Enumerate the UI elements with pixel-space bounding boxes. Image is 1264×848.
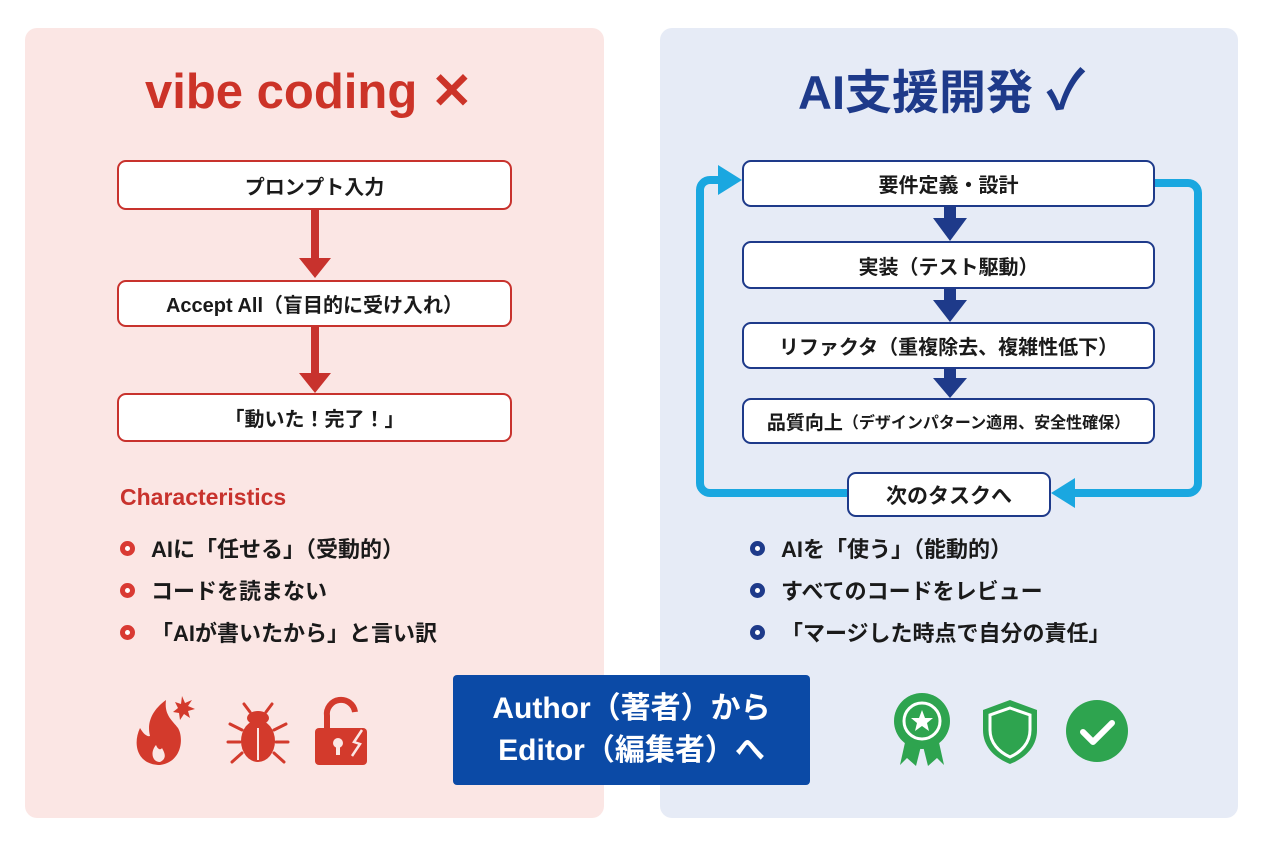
panel: AI assisted development <box>660 28 1238 818</box>
flow box: accept all: Accept All（盲目的に受け入れ） <box>166 295 463 317</box>
flow box: prompt <box>117 160 512 210</box>
flow box: requirements <box>742 160 1155 207</box>
panel: vibe coding <box>25 28 604 818</box>
flow box: prompt: プロンプト入力 <box>245 176 384 198</box>
flow box: refactor <box>742 322 1155 369</box>
callout: Author to Editor: Author（著者）から <box>492 692 771 725</box>
flow box: accept all <box>117 280 512 327</box>
icons: fire bug lock <box>136 696 367 765</box>
arrows: red <box>299 210 331 393</box>
list: vibe characteristics: 「AIが書いたから」と言い訳 <box>151 621 437 646</box>
callout: Author to Editor: Editor（編集者）へ <box>498 734 765 767</box>
flow box: done <box>117 393 512 442</box>
flow box: next task: 次のタスクへ <box>886 484 1012 508</box>
title: vibe coding: vibe coding ✕ <box>145 63 473 119</box>
arrows: blue flow and cyan loop <box>696 165 1202 508</box>
list: vibe characteristics: コードを読まない <box>151 579 327 604</box>
list: AI assisted points: AIを「使う」（能動的） <box>781 537 1012 562</box>
flow box: implementation: 実装（テスト駆動） <box>858 256 1038 278</box>
heading: Characteristics: Characteristics <box>120 484 286 510</box>
callout: Author to Editor <box>453 675 810 785</box>
icons: medal shield check <box>894 693 1128 766</box>
flow box: quality <box>742 398 1155 444</box>
flow box: done: 「動いた！完了！」 <box>224 409 404 431</box>
list: vibe characteristics: AIに「任せる」（受動的） <box>151 537 404 562</box>
list: AI assisted points <box>750 537 1111 646</box>
list: AI assisted points: すべてのコードをレビュー <box>781 579 1043 604</box>
flow box: refactor: リファクタ（重複除去、複雑性低下） <box>779 337 1118 359</box>
list: vibe characteristics <box>120 537 437 646</box>
list: AI assisted points: 「マージした時点で自分の責任」 <box>781 621 1111 646</box>
flow box: requirements: 要件定義・設計 <box>878 175 1018 197</box>
flow box: implementation <box>742 241 1155 289</box>
flow box: quality: （デザインパターン適用、安全性確保） <box>843 415 1130 432</box>
title: AI支援開発: AI支援開発 ✓ <box>798 61 1085 121</box>
flow box: quality: 品質向上 <box>767 412 843 434</box>
flow box: next task <box>847 472 1051 517</box>
